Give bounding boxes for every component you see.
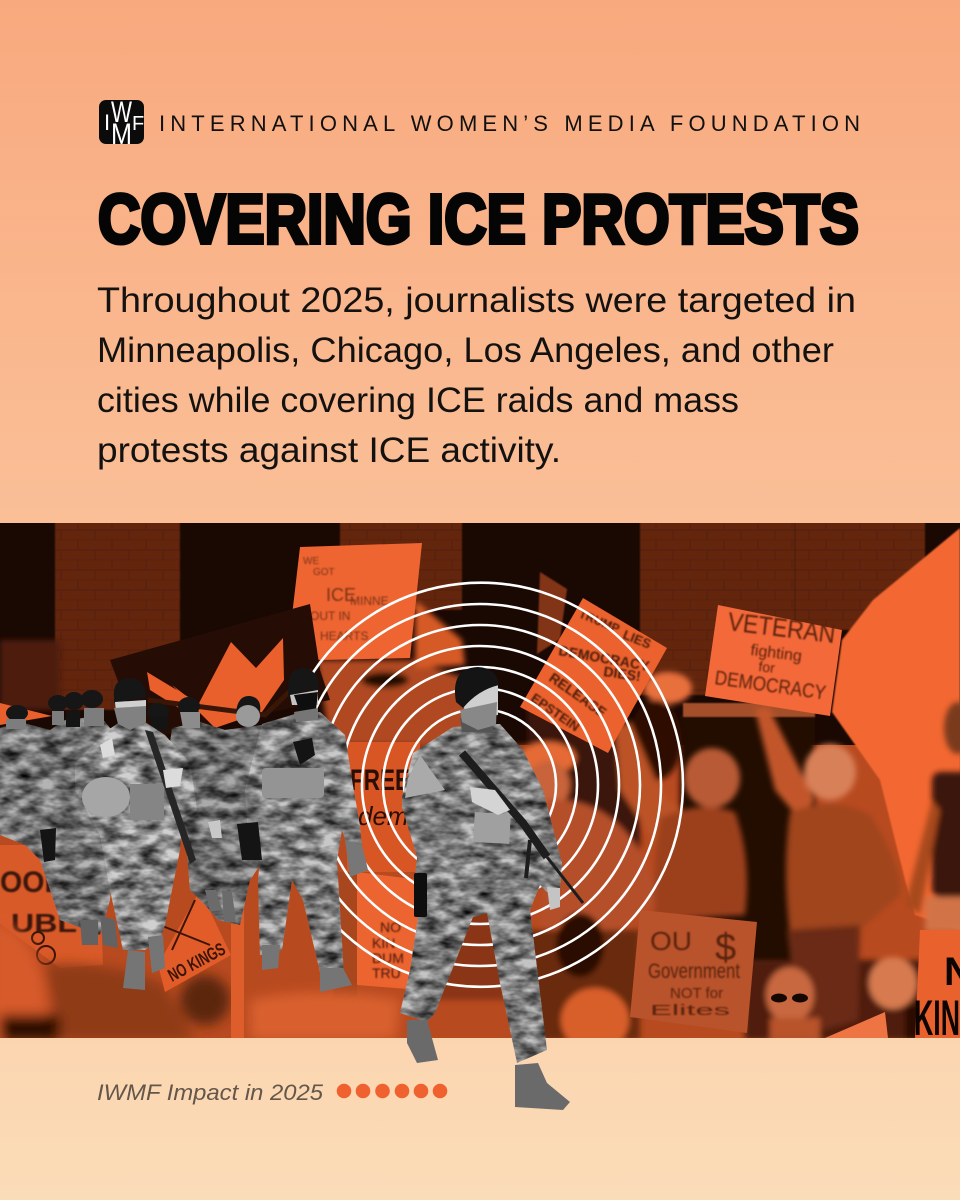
right hand: [547, 887, 560, 910]
sign: we got ICE: WE: [303, 556, 319, 567]
intro text block: Throughout 2025, journalists were targeted in: [97, 281, 856, 320]
sign: Veteran fighting for democracy: for: [758, 658, 776, 676]
sign: our republic: OOL: [0, 866, 62, 899]
sign: free sign: dem: [358, 801, 409, 831]
logo: IWMF: I: [104, 110, 110, 135]
sign: Veteran fighting for democracy: VETERAN: [726, 606, 837, 649]
logo: IWMF: [99, 96, 144, 151]
crowd: foreground bottom left: [0, 920, 400, 1040]
sign: our republic: UBL: [11, 908, 77, 938]
soldier: third from right, with helmet pack: [75, 678, 197, 990]
sign: No Kings Dump Trump: DUM: [372, 950, 404, 966]
sign: Trump lies democracy dies: [520, 598, 667, 753]
sign: our government is not for elites: Government: [648, 960, 740, 983]
crowd: blurred people behind rings: [317, 600, 960, 1052]
soldiers: two behind right of the helmet-pack soldier: [147, 696, 272, 925]
footer label: IWMF Impact in 2025: [97, 1080, 324, 1105]
boot right: [515, 1063, 570, 1110]
sign: crown: [110, 604, 330, 740]
sign: No Kings Dump Trump: TRU: [372, 965, 401, 981]
sign: we got ICE: OUT IN: [310, 609, 350, 623]
sign: our government is not for elites: OU: [650, 926, 692, 956]
soldier: second from front: [237, 668, 368, 992]
sign: we got ICE: MINNE: [350, 594, 389, 608]
face and mask: [455, 667, 499, 733]
sign: we got ICE: ICE: [326, 585, 356, 605]
sign: No Kings Dump Trump: KIN: [372, 935, 395, 951]
sign: our government is not for elites: $: [715, 927, 736, 969]
sign: narrow dark sign: [537, 572, 567, 654]
progress dots: [337, 1084, 447, 1098]
brick wall and dark doorways: [0, 515, 960, 965]
foreground soldier: [400, 667, 583, 1110]
sign: No Kings right edge: [914, 930, 960, 1046]
logo: IWMF: M: [111, 118, 132, 151]
intro text block: [97, 281, 856, 470]
concentric rings: [296, 583, 683, 987]
sign: Trump lies democracy dies: DIES!: [603, 663, 642, 684]
soldiers in the background column: [0, 690, 120, 948]
sign: Trump lies democracy dies: TRUMP: [577, 607, 622, 636]
logo: IWMF: W: [111, 96, 132, 129]
sign: small bottom sign: [825, 1012, 888, 1038]
intro text block: Minneapolis, Chicago, Los Angeles, and other: [97, 331, 834, 370]
sign: Trump lies democracy dies: EPSTEIN: [528, 690, 582, 734]
sign: No Kings: NO KINGS: [164, 939, 229, 986]
intro text block: cities while covering ICE raids and mass: [97, 381, 739, 420]
sign: free sign: [347, 742, 420, 872]
sign: we got ICE: [288, 543, 422, 660]
sign: Trump lies democracy dies: LIES: [621, 627, 654, 652]
sign: No Kings: [158, 890, 231, 992]
left sleeve highlight: [405, 755, 445, 798]
hand: [470, 787, 510, 815]
sign pole: [231, 908, 244, 1038]
radio on hip: [414, 873, 427, 917]
intro text block: protests against ICE activity.: [97, 431, 561, 470]
sign: our government is not for elites: Elites: [650, 1002, 730, 1019]
light strip at far left: [0, 703, 52, 725]
boot left: [407, 1020, 438, 1063]
chest pouch: [473, 812, 511, 844]
sign: Veteran fighting for democracy: [705, 605, 842, 716]
rifle: [462, 753, 583, 903]
sign: we got ICE: GOT: [313, 567, 335, 578]
logo: IWMF: F: [132, 113, 144, 135]
sign: free sign: FREE: [350, 764, 410, 797]
sign: our government is not for elites: NOT for: [670, 985, 723, 1002]
sign: we got ICE: HEARTS: [320, 629, 368, 643]
light wall at right: [832, 528, 960, 930]
sign: Veteran fighting for democracy: fighting: [750, 642, 803, 665]
sign: Veteran fighting for democracy: DEMOCRACY: [713, 667, 827, 705]
sign: Trump lies democracy dies: RELEASE: [546, 669, 610, 720]
sunglasses: [771, 994, 808, 1002]
photo band: protest crowd in orange duotone: [0, 515, 960, 1052]
sign: our republic: [0, 845, 103, 968]
organisation name: INTERNATIONAL WOMEN’S MEDIA FOUNDATION: [159, 111, 860, 136]
sign: Trump lies democracy dies: DEMOCRACY: [557, 642, 651, 674]
sign: our government is not for elites: [630, 910, 757, 1033]
sign: No Kings Dump Trump: NO: [380, 919, 401, 935]
sign: No Kings Dump Trump: [333, 872, 420, 998]
